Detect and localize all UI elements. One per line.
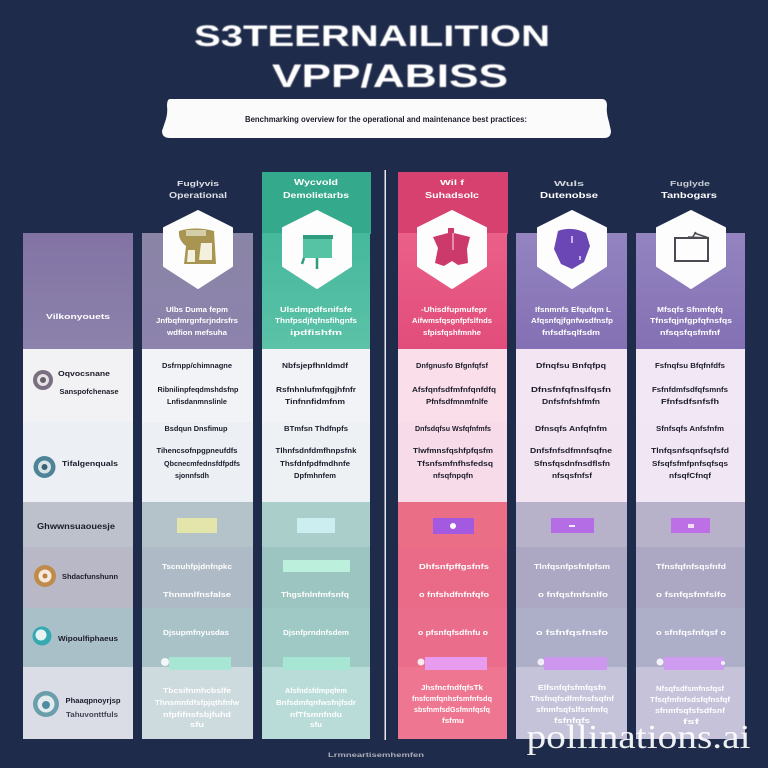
row 1 text: Nbfsjepfhnldmdf [282,361,349,370]
label: row 2: Tifalgenquals [62,459,118,468]
row 4 text [534,562,610,599]
hexagon icon badge [657,211,725,288]
row 4 text [656,562,727,599]
column header: option 3: Suhadsolc [425,191,480,200]
row 6 text [412,683,492,725]
row 1 text: Dnfsfnfshfmfn [542,397,600,406]
row 2 text: BTmfsn Thdfnpfs [284,424,348,433]
hexagon icon badge [418,211,486,288]
row 4 text: Tlnfqsnfpsfnfpfsm [534,562,610,571]
row 2 text [156,424,240,480]
title: S3TEERNAILITION [194,20,550,53]
row 6 text: Nfsqfsdfsmfnsfqsf [656,684,725,693]
footer note: Lrmneartisemhemfen [328,752,424,759]
header description: Jnfbqfmrgnfsrjndrsfrs [156,316,238,325]
row 1 text: Ribnilinpfeqdmshdsfnp [158,385,239,394]
header description: wdfion mefsuha [166,328,228,337]
divider line [384,170,386,740]
column header: option 4: Dutenobse [540,191,599,200]
label: header row: Vilkonyouets [46,312,110,321]
label: row 6 [66,696,121,719]
row 5 text: Djsupmfnyusdas [163,628,229,637]
header description: Aifwmsfqsgnfpfslfnds [412,316,492,325]
row 2 text [413,424,493,480]
header description: fnfsdfsqlfsdm [542,328,600,337]
header description [412,305,492,337]
column header: option 2: Demolietarbs [283,191,350,200]
row 1 text: Pfnfsdfmnmfnlfe [426,397,488,406]
label: row 1: Oqvocsnane [58,369,110,378]
icon: row 2 badge [34,456,56,478]
label: row 6: Tahuvonttfuls [66,710,118,719]
row 2 text: Tfsnfsmfnfhsfedsq [417,459,493,468]
row 2 text: Dnfsdqfsu Wsfqfnfmfs [415,424,491,433]
row 6 text: Tbcsifnmhcbslfe [163,686,231,695]
hexagon icon badge [164,211,232,288]
row 1 text: Dfnqfsu Bnfqfpq [536,361,606,370]
column header: option 2: Wycvold [294,177,338,187]
panel: row labels column [23,233,133,739]
chip [177,518,217,533]
row 2 text: Sfnsfqsdnfnsdflsfn [534,459,610,468]
row 6 text: Tfsqfmfnfsdsfqfnsfqf [650,695,731,704]
header description: sfpisfqshfmnhe [423,328,481,337]
row 6 text: Thnsmnfdfsfpjqthfnfw [155,698,239,707]
row 1 text: Ffnfsdfsnfsfh [661,397,719,406]
header description: Ulbs Duma fepm [166,305,228,314]
row 2 text: Qbcnecmfednsfdfpdfs [164,459,240,468]
row 1 text [652,361,728,406]
header description: Thnfpsdjfqfnsfihgnfs [275,316,357,325]
row 6 text: sfu [310,720,322,729]
row 1 text [412,361,496,406]
row 4 text: Dhfsnfpffgsfnfs [419,562,489,571]
header description [156,305,238,337]
label: row 6: Phaaqpnoyrjsp [66,696,121,705]
row 6 text: fnsfcmfqnhsfsmfnfsdq [412,694,492,703]
row 6 text: fsf [683,717,700,726]
column header: option 5: Fuglyde [670,179,710,188]
row 6 text [155,686,239,729]
column header: option 4: Wuls [554,179,584,188]
header description: nfsqsfqsfmfnf [660,328,721,337]
row 2 text: nfsqfnpqfn [433,471,473,480]
bar [418,657,487,670]
row 6 text [276,686,356,729]
label: row 4: Shdacfunshunn [62,572,118,581]
row 1 text [531,361,612,406]
row 6 text: Thsfnqfsdfmfnsfsqfnf [530,694,615,703]
row 6 text: Elfsnfqfsfmfqsfn [538,683,606,692]
row 6 text: Afsfndsfdmpqfem [285,686,347,695]
panel: column 4 [516,211,627,739]
icon: row 1 badge [33,370,53,390]
row 2 text: Tlnfqsnfsqnfsqfsfd [651,446,729,455]
row 2 text: Thsfdnfpdfmdhnfe [280,459,350,468]
watermark: pollinations.ai [526,719,750,756]
row 2 text [651,424,729,480]
icon: row 4 badge [34,565,56,587]
header description [650,305,732,337]
label: row 3: Ghwwnsuaouesje [37,522,116,531]
column header: option 1: Fuglyvis [177,179,219,188]
bar [283,560,350,572]
panel: column 1 [142,211,253,739]
column header: option 5 [661,179,718,200]
row 2 text: nfsqsfnfsf [552,471,593,480]
row 5 text: Djsnfprndnfsdem [283,628,349,637]
row 6 text [650,684,731,726]
row 6 text: sfu [190,720,205,729]
hexagon icon badge [538,211,606,288]
row 1 text: Dsfrnpp/chimnagne [162,361,232,370]
row 1 text: Afsfqnfsdfmfnfqnfdfq [412,385,496,394]
column header: option 3: Wil f [440,178,465,187]
row 1 text: Dfnsfnfqfnslfqsfn [531,385,612,394]
panel: column 5 [636,211,745,739]
row 2 text: Dnfsfnfsdfmnfsqfne [530,446,612,455]
row 6 text: nfTfsmnfndu [290,710,342,719]
row 2 text: Sfnfsqfs Anfsfnfm [656,424,724,433]
row 6 text: sfnmfsqfsfsdfsnf [655,706,726,715]
row 6 text: sfnmfsqfslfsnfmfq [536,705,608,714]
row 5 text: o fsfnfqsfnsfo [536,628,609,637]
row 6 text: JhsfncfndfqfsTk [421,683,484,692]
bar [656,657,725,670]
row 2 text: Dpfmhnfem [294,471,336,480]
row 4 text: o fnfshdfnfnfqfo [419,590,490,599]
row 6 text: Bnfsdmfqnfwsfnjfsdr [276,698,356,707]
label: row 5: Wipoulfiphaeus [58,634,118,643]
row 2 text: nfsqfCfnqf [669,471,712,480]
bar [161,657,231,670]
row 2 text: Tihencsofnpgpneufdfs [156,446,238,455]
row 4 text: Thnmnlfnsfalse [163,590,231,599]
row 2 text: Sfsqfsfmfpnfsqfsqs [652,459,728,468]
row 1 text: Rsfnhnlufmfqgjhfnfr [276,385,356,394]
title: VPP/ABISS [272,58,508,94]
row 1 text: Tinfnnfidmfnm [285,397,345,406]
hexagon icon badge [283,211,351,288]
icon: row 6 badge [33,691,59,717]
row 1 text: Dnfgnusfo Bfgnfqfsf [416,361,488,370]
chip [671,518,710,533]
row 6 text: fsfmu [442,716,464,725]
column header: option 1: Operational [169,191,227,200]
row 1 text: Fsfnfdmfsdfqfsmnfs [652,385,728,394]
row 2 text: Dfnsqfs Anfqfnfm [535,424,607,433]
row 1 text: Fsfnqfsu Bfqfnfdfs [655,361,725,370]
row 4 text [419,562,490,599]
label: row 1: Sanspofchenase [60,387,118,396]
header description: Ulsdmpdfsnifsfe [280,305,352,314]
row 2 text: Tlhnfsdnfdmfhnpsfnk [276,446,357,455]
row 2 text: Tlwfmnsfqshfpfqsfm [413,446,493,455]
column header: option 3 [398,172,508,234]
row 6 text [530,683,615,725]
chip [551,518,594,533]
row 4 text: Tfnsfqfnfsqsfnfd [656,562,726,571]
row 2 text [276,424,357,480]
row 4 text: Thgsfnlnfmfsnfq [281,590,349,599]
row 1 text [158,361,239,406]
row 2 text [530,424,612,480]
title [194,20,550,94]
column header: option 1 [169,179,227,200]
subtitle banner: Benchmarking overview for the operational and maintenance best practices: [245,115,527,124]
header description [531,305,613,337]
label: row 1 [58,369,118,396]
row 6 text: sbsfnmfsdGsfmnfqsfq [414,705,490,714]
header description: Tfnsfqjnfgpfqfnsfqs [650,316,732,325]
row 4 text: o fnfqsfmfsnlfo [538,590,609,599]
icon: row 5 badge [32,626,52,646]
header description [275,305,357,337]
header description: ipdfishfm [290,328,343,337]
column header: option 4 [540,179,599,200]
row 2 text: Bsdqun Dnsfimup [164,424,228,433]
row 5 text: o pfsnfqfsdfnfu o [418,628,488,637]
header description: -Uhisdfupmufepr [421,305,487,314]
row 5 text: o sfnfqsfnfqsf o [656,628,726,637]
header description: Mfsqfs Sfnmfqfq [657,305,723,314]
row 1 text: Lnfisdanmnslinle [167,397,227,406]
row 4 text: Tscnuhfpjdnfnpkc [162,562,232,571]
panel: column 2 (highlighted) [262,211,370,739]
column header: option 5: Tanbogars [661,191,718,200]
row 4 text [162,562,232,599]
row 1 text [276,361,356,406]
row 6 text: nfpfifnsfsbjfuhd [163,710,231,719]
row 2 text: sjonnfsdh [175,471,209,480]
chip [297,518,335,533]
header description: Ifsnmnfs Efqufqm L [535,305,611,314]
bar [283,657,350,670]
row 6 text: fsfnfqfs [554,716,590,725]
header description: Afqsnfqjfgnfwsdfnsfp [531,316,613,325]
subtitle banner [162,99,611,138]
chip [433,518,474,534]
panel: column 3 (highlighted) [398,211,507,739]
column header: option 2 [262,172,371,234]
row 4 text: o fsnfqsfmfslfo [656,590,727,599]
bar [538,657,607,670]
